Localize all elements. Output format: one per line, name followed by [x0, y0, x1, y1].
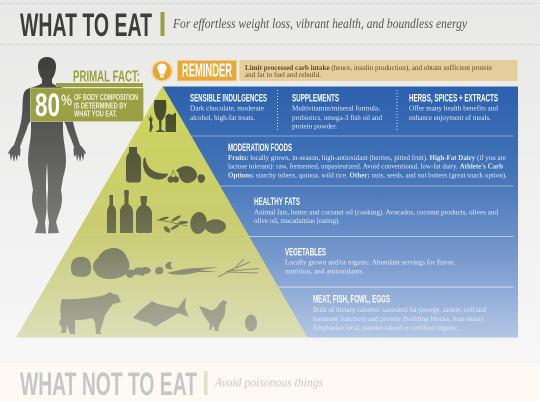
text: vegetables: Locally grown and/or organic. Abundant servings for flavor,	[285, 260, 455, 267]
callout: primal fact	[30, 68, 144, 123]
text: herbs, spices, extracts: enhance enjoyment of meals.	[409, 115, 491, 122]
heading: what not to eat: WHAT NOT TO EAT	[20, 366, 197, 401]
text: healthy fats: Animal fats, butter and coconut oil (cooking). Avocados, coconut products, olives and	[254, 210, 499, 217]
callout: primal fact: WHAT YOU EAT.	[74, 109, 117, 119]
reminder label: REMINDER	[182, 60, 232, 80]
heading: what to eat: WHAT TO EAT	[20, 7, 152, 43]
icon: human silhouette	[8, 57, 86, 234]
callout: primal fact: PRIMAL FACT:	[73, 68, 140, 86]
panel: food descriptions	[163, 86, 518, 338]
text: supplements: probiotics, omega-3 fish oil and	[292, 115, 383, 122]
text: moderation foods: Options: starchy tubers, quinoa, wild rice. Other: nuts, seeds, and nut butters (great snack option).	[228, 173, 507, 180]
text: healthy fats: olive oil, macadamias (eating).	[254, 218, 340, 225]
reminder note	[240, 60, 518, 81]
text: herbs, spices, extracts: Offer many health benefits and	[409, 106, 499, 113]
text: moderation foods: lactose tolerant): raw, fermented, unpasteurized. Avoid conventional, low-fat dairy. Athlete's Carb	[228, 164, 503, 171]
text: meat, fish, fowl, eggs: Bulk of dietary calories: saturated fat (energy, satiety, cell and	[313, 307, 487, 314]
subtitle: avoid poisonous things: Avoid poisonous things	[214, 374, 323, 390]
chart: food pyramid	[16, 86, 308, 338]
text: moderation foods: Fruits: locally grown, in-season, high-antioxidant (berries, pitted fruit). High-Fat Dairy (if you are	[228, 155, 506, 162]
icon: light bulb	[151, 60, 173, 82]
text: sensible indulgences: SENSIBLE INDULGENCES	[190, 93, 267, 105]
text: meat, fish, fowl, eggs: MEAT, FISH, FOWL, EGGS	[313, 294, 390, 306]
text: sensible indulgences: alcohol, high-fat treats.	[190, 115, 255, 122]
reminder note: Limit processed carb intake (hence, insulin production), and obtain sufficient protein	[245, 65, 493, 72]
text: meat, fish, fowl, eggs	[313, 294, 487, 332]
reminder note: and fat to fuel and rebuild.	[245, 72, 321, 79]
icons: meat, fish, fowl, eggs tier	[59, 292, 257, 334]
text: supplements: protein powder.	[292, 124, 337, 131]
text: sensible indulgences: Dark chocolate, moderate	[190, 106, 264, 113]
text: meat, fish, fowl, eggs: hormone function) and protein (building blocks, lean mass).	[313, 316, 485, 323]
subtitle: For effortless weight loss, vibrant health, and boundless energy	[172, 17, 468, 32]
text: vegetables: nutrition, and antioxidants.	[285, 268, 364, 276]
callout: primal fact: %	[61, 92, 72, 110]
text: vegetables	[285, 247, 455, 276]
text: herbs, spices, extracts	[409, 93, 499, 122]
text: supplements: SUPPLEMENTS	[292, 93, 339, 105]
panel: what not to eat	[0, 362, 540, 401]
text: moderation foods	[228, 142, 507, 180]
text: healthy fats: HEALTHY FATS	[254, 196, 300, 208]
text: meat, fish, fowl, eggs: Emphasize local, pasture-raised or certified organic.	[313, 325, 459, 332]
callout: primal fact: OF BODY COMPOSITION	[74, 92, 138, 102]
text: supplements	[292, 93, 383, 131]
text: healthy fats	[254, 196, 499, 225]
statistic: 80 percent: 80	[35, 87, 60, 123]
icons: vegetables tier	[71, 248, 259, 279]
callout: primal fact: IS DETERMINED BY	[74, 100, 127, 110]
icons: indulgences tier	[148, 100, 176, 132]
heading: what to eat	[20, 7, 468, 43]
text: vegetables: VEGETABLES	[285, 247, 326, 259]
text: supplements: Multivitamin/mineral formula,	[292, 106, 380, 113]
text: sensible indulgences	[190, 93, 267, 122]
reminder label	[177, 60, 237, 81]
text: moderation foods: MODERATION FOODS	[228, 142, 292, 154]
icons: moderation tier	[126, 147, 205, 183]
icons: healthy fats tier	[107, 190, 226, 235]
